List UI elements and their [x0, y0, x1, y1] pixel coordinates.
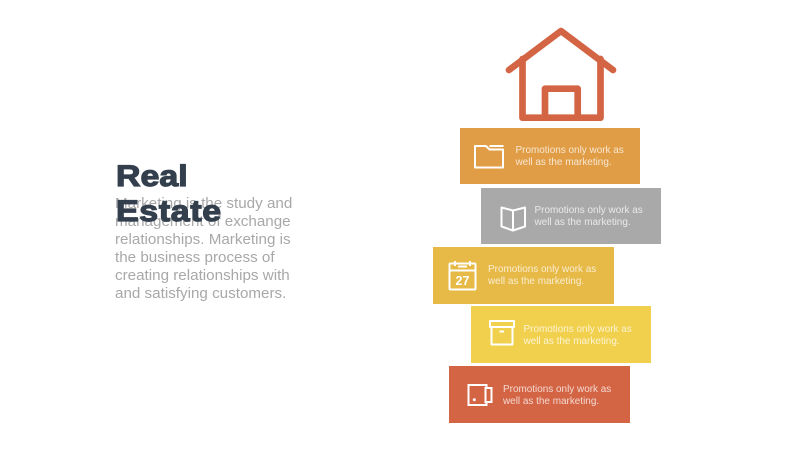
- panel: box step: [471, 306, 651, 363]
- icon: device: [468, 384, 492, 406]
- text: calendar step: well as the marketing.: [488, 276, 584, 287]
- body text: Marketing is the study and: [115, 195, 292, 212]
- text: folder step: [516, 144, 624, 168]
- icon: calendar: 27: [456, 274, 469, 288]
- panel: folder step: [460, 128, 640, 184]
- text: book step: [534, 204, 643, 228]
- title: Estate: [116, 194, 221, 228]
- text: calendar step: Promotions only work as: [488, 264, 596, 275]
- text: box step: Promotions only work as: [524, 324, 632, 335]
- text: tablet step: well as the marketing.: [503, 396, 599, 407]
- text: tablet step: Promotions only work as: [503, 384, 611, 395]
- body text: [115, 195, 292, 302]
- text: book step: well as the marketing.: [534, 216, 631, 228]
- text: box step: [524, 324, 632, 347]
- text: box step: well as the marketing.: [524, 336, 620, 347]
- text: folder step: Promotions only work as: [516, 144, 624, 156]
- panel: calendar step: [433, 247, 614, 304]
- body text: creating relationships with: [115, 267, 290, 284]
- body text: the business process of: [115, 249, 275, 266]
- text: book step: Promotions only work as: [534, 204, 643, 216]
- icon: house: [506, 28, 616, 121]
- icon: book: [500, 206, 526, 232]
- icon: folder: [474, 145, 504, 168]
- body text: management of exchange: [115, 213, 291, 230]
- title: Real: [116, 160, 187, 192]
- icon: calendar: [448, 261, 476, 290]
- text: calendar step: [488, 264, 596, 287]
- text: tablet step: [503, 384, 611, 407]
- text: folder step: well as the marketing.: [516, 156, 612, 168]
- body text: and satisfying customers.: [115, 285, 286, 302]
- panel: book step: [480, 188, 661, 244]
- panel: tablet step: [449, 366, 630, 423]
- title: [116, 160, 221, 228]
- icon: archive box: [489, 320, 515, 346]
- body text: relationships. Marketing is: [115, 231, 291, 248]
